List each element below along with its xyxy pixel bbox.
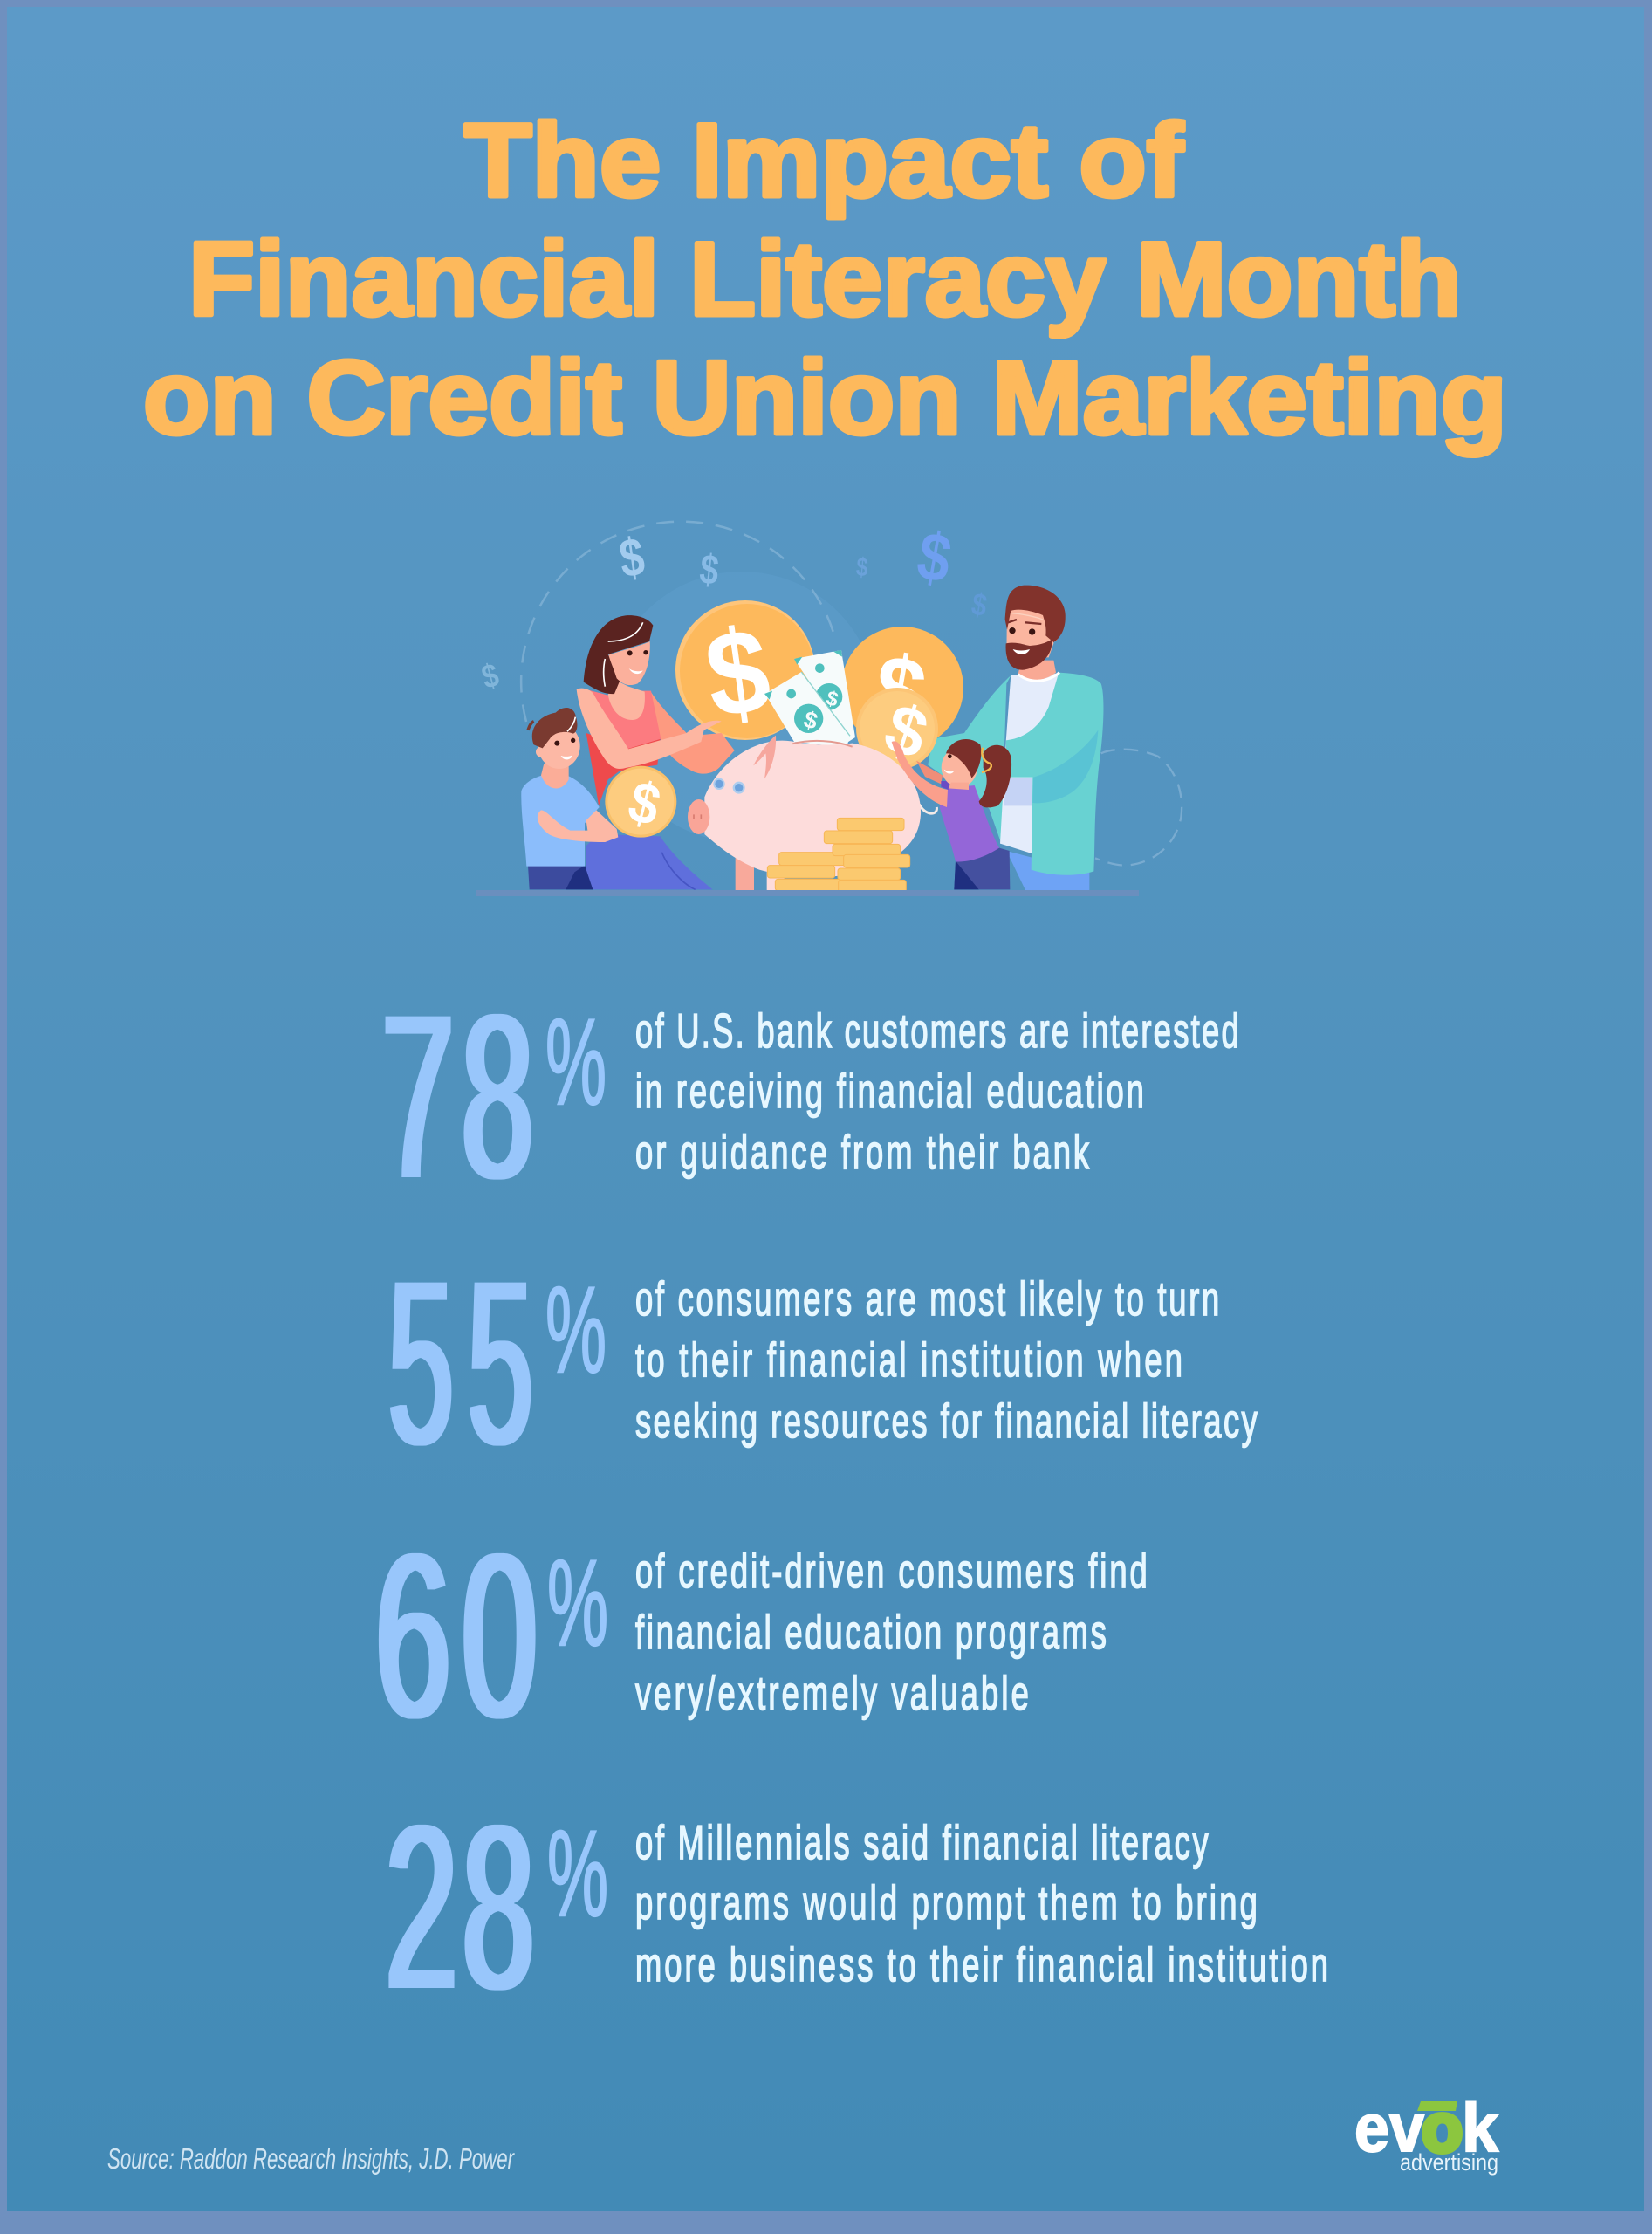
logo wordmark (1354, 2089, 1499, 2166)
piggy body (704, 741, 921, 877)
father trousers (1006, 851, 1089, 890)
stat: 55% (388, 1231, 1258, 1493)
mother skirt (586, 834, 713, 889)
dashed circle right (1095, 750, 1182, 866)
boy head (538, 723, 580, 769)
father t-shirt (1000, 674, 1063, 853)
description: in receiving financial education (635, 1064, 1144, 1118)
description (635, 1815, 1328, 1991)
number 55: 55 (388, 1231, 547, 1493)
floating dollar signs (478, 517, 990, 696)
mother hair (584, 615, 653, 694)
logo wordmark: ev (1354, 2089, 1425, 2166)
girl trousers (954, 848, 1010, 889)
piggy snout (688, 799, 709, 834)
illustration: family saving around a piggy bank (476, 517, 1182, 896)
floating dollar signs: $ (697, 546, 721, 594)
description: of credit-driven consumers find (635, 1544, 1148, 1598)
father smile (1013, 649, 1030, 654)
logo tagline: advertising (1400, 2149, 1498, 2176)
mother dress lower (586, 733, 661, 805)
big coin right (841, 627, 963, 750)
description: to their financial institution when (635, 1333, 1182, 1387)
number 78: 78 (382, 965, 541, 1227)
boy eyes (554, 741, 559, 746)
ground line (476, 890, 1139, 896)
boy (521, 708, 676, 889)
banknotes: $ (801, 706, 820, 735)
piggy tail (919, 805, 936, 813)
description: more business to their financial institution (635, 1937, 1328, 1991)
mother smile (629, 668, 643, 674)
small coin: $ (622, 769, 667, 839)
title: Financial Literacy Month (189, 221, 1462, 338)
girl far arm (916, 761, 943, 784)
piggy front leg (767, 864, 785, 890)
description (635, 1271, 1258, 1448)
description: programs would prompt them to bring (635, 1875, 1258, 1929)
percent sign: % (547, 1534, 608, 1671)
description (635, 1004, 1239, 1179)
title (143, 102, 1507, 456)
piggy eyes (713, 778, 725, 790)
father beard (1006, 640, 1052, 670)
boy neck (541, 764, 569, 788)
father (928, 586, 1103, 890)
girl hair (946, 739, 981, 778)
father face (1006, 602, 1053, 657)
big coin left: $ (698, 602, 778, 744)
number 60: 60 (375, 1506, 548, 1766)
piggy ear (753, 736, 776, 778)
girl head (942, 748, 977, 787)
title: The Impact of (464, 102, 1184, 219)
stat: 78% (382, 965, 1239, 1227)
number 28: 28 (386, 1776, 539, 2038)
big coin left (675, 600, 815, 744)
mother (577, 615, 735, 889)
piggy bank (688, 736, 936, 890)
hair tie (982, 748, 991, 772)
banknotes (764, 650, 855, 748)
girl shirt (940, 785, 999, 861)
stat: 28% (386, 1776, 1328, 2038)
description: seeking resources for financial literacy (635, 1394, 1258, 1448)
description: or guidance from their bank (635, 1125, 1090, 1179)
girl eye and smile (948, 754, 952, 758)
girl (892, 739, 1011, 889)
piggy rear leg (736, 855, 754, 890)
girl arm (892, 741, 948, 807)
percent sign: % (545, 993, 607, 1130)
boy smile (561, 755, 572, 759)
boy trousers (528, 866, 593, 889)
mother far arm (650, 691, 735, 774)
girl ponytail (979, 745, 1011, 807)
father jacket right side (1006, 673, 1103, 875)
father eyes (1009, 627, 1016, 634)
floating dollar signs: $ (616, 525, 648, 589)
description: very/extremely valuable (635, 1666, 1029, 1720)
father hair (1005, 586, 1066, 642)
mother top (586, 689, 661, 749)
description (635, 1544, 1148, 1720)
floating dollar signs: $ (912, 517, 956, 598)
description: of Millennials said financial literacy (635, 1815, 1209, 1869)
percent sign: % (545, 1261, 607, 1398)
father jacket back and left side (928, 675, 1011, 844)
boy hair (532, 708, 577, 748)
piggy slot (792, 741, 853, 747)
percent sign: % (547, 1805, 608, 1942)
dashed arc left (521, 522, 836, 722)
coin stacks (767, 818, 910, 893)
background glow circle (607, 572, 877, 842)
boy shirt (521, 774, 600, 867)
logo: evok advertising (1354, 2089, 1499, 2176)
stat: 60% (375, 1506, 1148, 1766)
source note: Source: Raddon Research Insights, J.D. Power (107, 2142, 515, 2175)
title: on Credit Union Marketing (143, 339, 1507, 456)
mother near arm (577, 689, 722, 769)
banknotes: $ (824, 686, 840, 711)
mother eyes (627, 650, 633, 655)
mother neckline (608, 681, 645, 720)
floating dollar signs: $ (478, 656, 503, 696)
coin held by girl: $ (876, 689, 936, 774)
big coin right: $ (866, 634, 934, 750)
boy arm (538, 810, 618, 842)
description: of consumers are most likely to turn (635, 1271, 1219, 1326)
father neck (1018, 661, 1056, 680)
small coin (605, 766, 676, 839)
description: of U.S. bank customers are interested (635, 1004, 1239, 1058)
floating dollar signs: $ (969, 587, 990, 624)
floating dollar signs: $ (855, 552, 869, 582)
logo wordmark: o (1422, 2089, 1463, 2166)
mother face (608, 641, 650, 685)
sleeve shading (1032, 730, 1098, 803)
logo wordmark: k (1462, 2089, 1499, 2166)
logo macron bar (1417, 2101, 1457, 2111)
description: financial education programs (635, 1605, 1107, 1659)
